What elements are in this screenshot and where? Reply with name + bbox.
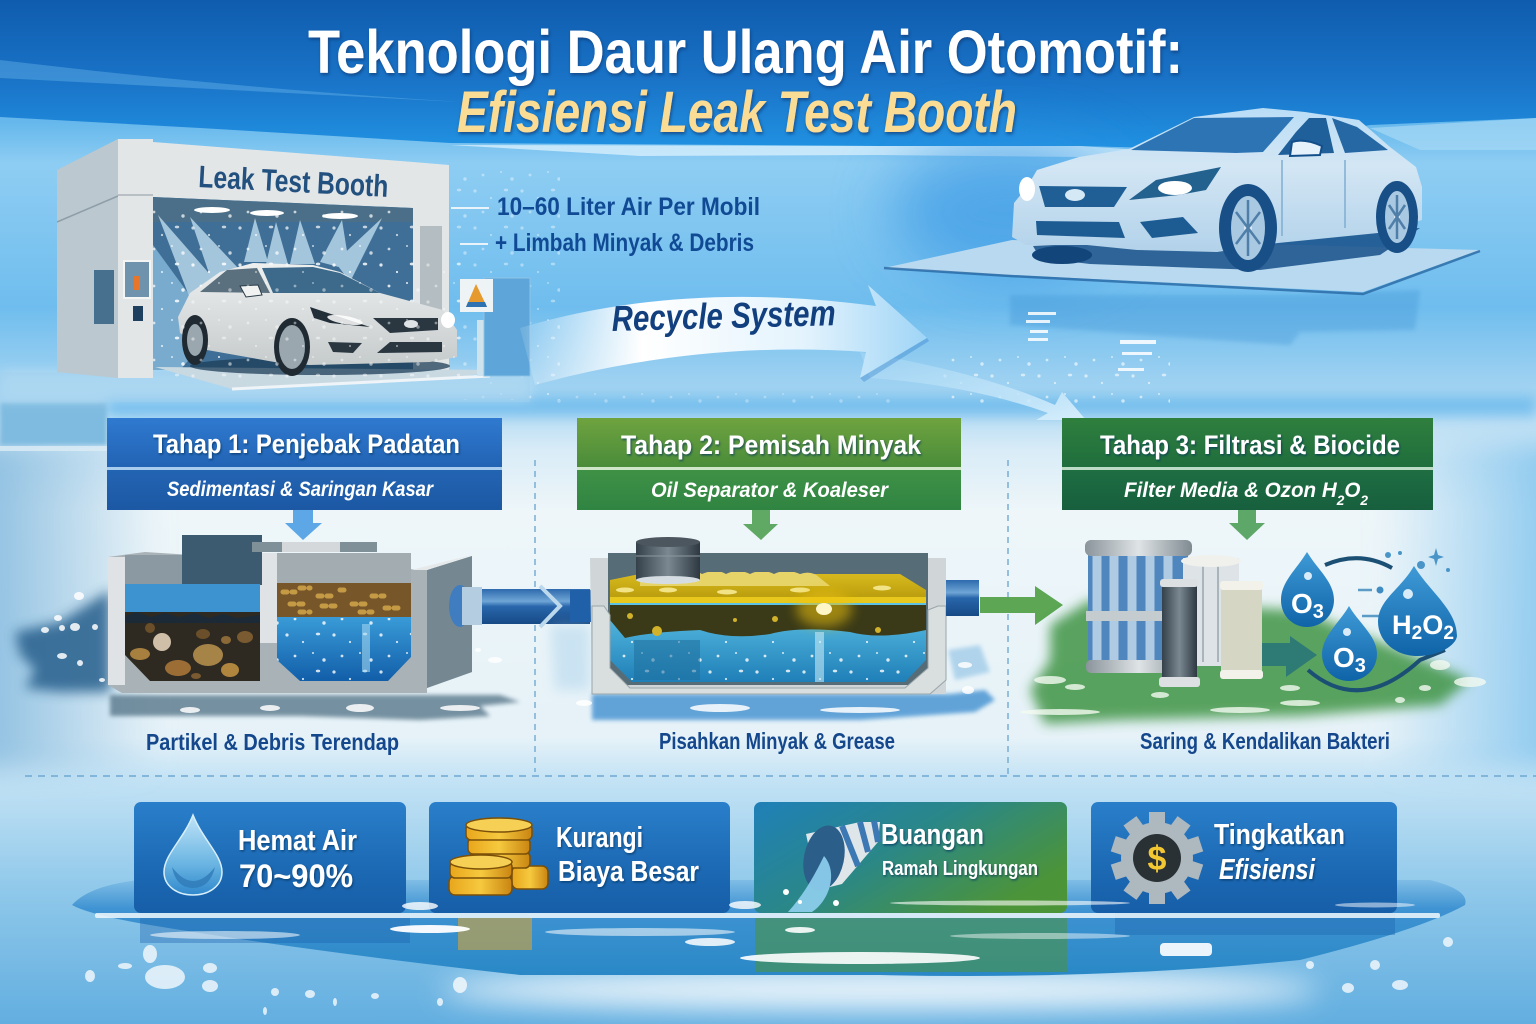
title <box>308 18 1183 145</box>
car shadow <box>1033 228 1420 270</box>
secondary curved arrow <box>860 352 1086 420</box>
benefit text: Tingkatkan <box>1214 819 1345 851</box>
stage 2 panel <box>550 418 1063 754</box>
left chamber sediment <box>125 584 260 682</box>
small dark filter <box>1159 579 1200 687</box>
stage 2 header <box>577 418 961 510</box>
hydrogen peroxide droplet: O <box>1422 610 1443 640</box>
arrow label: Recycle System <box>611 292 836 339</box>
tank frame front <box>592 606 946 694</box>
fact: water per car: 10–60 Liter Air Per Mobil <box>497 193 760 221</box>
hydrogen peroxide droplet: 2 <box>1412 623 1422 644</box>
large filter cartridge <box>1085 540 1192 673</box>
booth structure <box>118 139 449 378</box>
benefit card: reduce cost <box>429 802 730 913</box>
main swoosh arrow <box>520 285 927 385</box>
stage 2 header: Tahap 2: Pemisah Minyak <box>621 430 922 460</box>
stage 3 header <box>1062 418 1433 510</box>
benefit card: save water <box>134 802 406 913</box>
stage 1 header: Sedimentasi & Saringan Kasar <box>167 478 435 501</box>
section dividers <box>535 460 1008 775</box>
benefit text line 2: Biaya Besar <box>558 856 699 888</box>
stage 1 header <box>107 418 502 510</box>
stage 3 header: Filter Media & Ozon H2O2 <box>1124 479 1368 508</box>
stage 1 down arrow <box>285 510 322 540</box>
fact: oil and debris waste: + Limbah Minyak & Debris <box>495 229 754 257</box>
stage 3 panel <box>1020 418 1486 754</box>
icon: gear with dollar <box>1111 812 1203 904</box>
icon: discharge pipe <box>783 821 880 912</box>
car platform <box>884 240 1480 292</box>
control panel <box>124 261 150 298</box>
benefit text line 2: Ramah Lingkungan <box>882 858 1038 880</box>
ozone droplet 1: O <box>1291 588 1313 619</box>
pool reflections <box>95 900 1440 972</box>
tank top equipment <box>182 535 262 585</box>
bottom glow <box>440 970 1320 1010</box>
benefit value: 70~90% <box>239 858 353 894</box>
icon: gear with dollar: $ <box>1148 840 1167 878</box>
ozone droplet 2: O <box>1333 642 1355 673</box>
stage 2 outlet pipe <box>946 580 979 616</box>
hydrogen peroxide droplet: 2 <box>1443 623 1454 644</box>
warning sign stand <box>460 278 530 376</box>
recirculation arcs <box>1308 558 1445 690</box>
booth interior with spray <box>153 197 413 375</box>
bottom water splashes <box>85 937 1453 1015</box>
car in booth <box>175 262 460 382</box>
title line 2: Efisiensi Leak Test Booth <box>457 80 1017 145</box>
stage 3 down arrow <box>1229 510 1265 540</box>
ozone droplet 1: 3 <box>1313 601 1324 623</box>
car body <box>1012 108 1422 252</box>
stage 1 splash <box>15 590 520 720</box>
separator tank <box>590 537 1063 694</box>
stage 2 header: Oil Separator & Koaleser <box>651 479 890 502</box>
icon: gold coins <box>449 818 548 895</box>
ozone droplet 1 <box>1281 552 1334 627</box>
green ground <box>1020 600 1486 724</box>
outlet pipe <box>449 585 590 627</box>
benefit text line 2: Efisiensi <box>1219 854 1316 886</box>
stage 3 header: Tahap 3: Filtrasi & Biocide <box>1100 430 1400 460</box>
hydrogen peroxide droplet <box>1378 566 1457 656</box>
oil skimmer cylinder <box>636 537 700 584</box>
stage 2 caption: Pisahkan Minyak & Grease <box>659 728 895 754</box>
booth platform <box>155 367 500 389</box>
medium white filter <box>1181 555 1241 666</box>
sparkles and bubbles <box>1385 548 1450 572</box>
stage 1 header: Tahap 1: Penjebak Padatan <box>153 429 460 459</box>
benefit card: efficiency <box>1091 802 1397 913</box>
stage 2 water splash <box>550 590 995 720</box>
stage 3 caption: Saring & Kendalikan Bakteri <box>1140 728 1390 754</box>
ozone droplet 2: 3 <box>1355 655 1366 677</box>
stage 1 caption: Partikel & Debris Terendap <box>146 729 399 755</box>
floor reflection <box>1010 290 1420 345</box>
ceramic filter <box>1220 581 1263 679</box>
hydrogen peroxide droplet: H <box>1392 610 1412 640</box>
recycle system arrow <box>520 285 1086 420</box>
booth left side <box>57 139 118 378</box>
benefit text: Buangan <box>881 819 984 851</box>
water pool <box>72 880 1466 976</box>
teal flow arrow <box>1262 636 1317 677</box>
ozone droplet 2 <box>1322 606 1377 681</box>
hero car <box>884 108 1480 371</box>
benefit text: Kurangi <box>556 822 643 854</box>
green flow arrow <box>980 586 1063 625</box>
label connector lines <box>451 208 489 244</box>
stage 1 panel <box>15 418 590 755</box>
right chamber gravel and water <box>277 583 411 682</box>
booth sign: Leak Test Booth <box>198 159 389 204</box>
settling tank <box>108 535 590 693</box>
stage 2 down arrow <box>743 510 778 540</box>
icon: water drop <box>164 815 222 895</box>
benefit card: eco discharge <box>754 802 1067 913</box>
title line 1: Teknologi Daur Ulang Air Otomotif: <box>308 18 1183 86</box>
panel: leak test booth <box>0 139 530 402</box>
benefit text: Hemat Air <box>238 825 357 857</box>
